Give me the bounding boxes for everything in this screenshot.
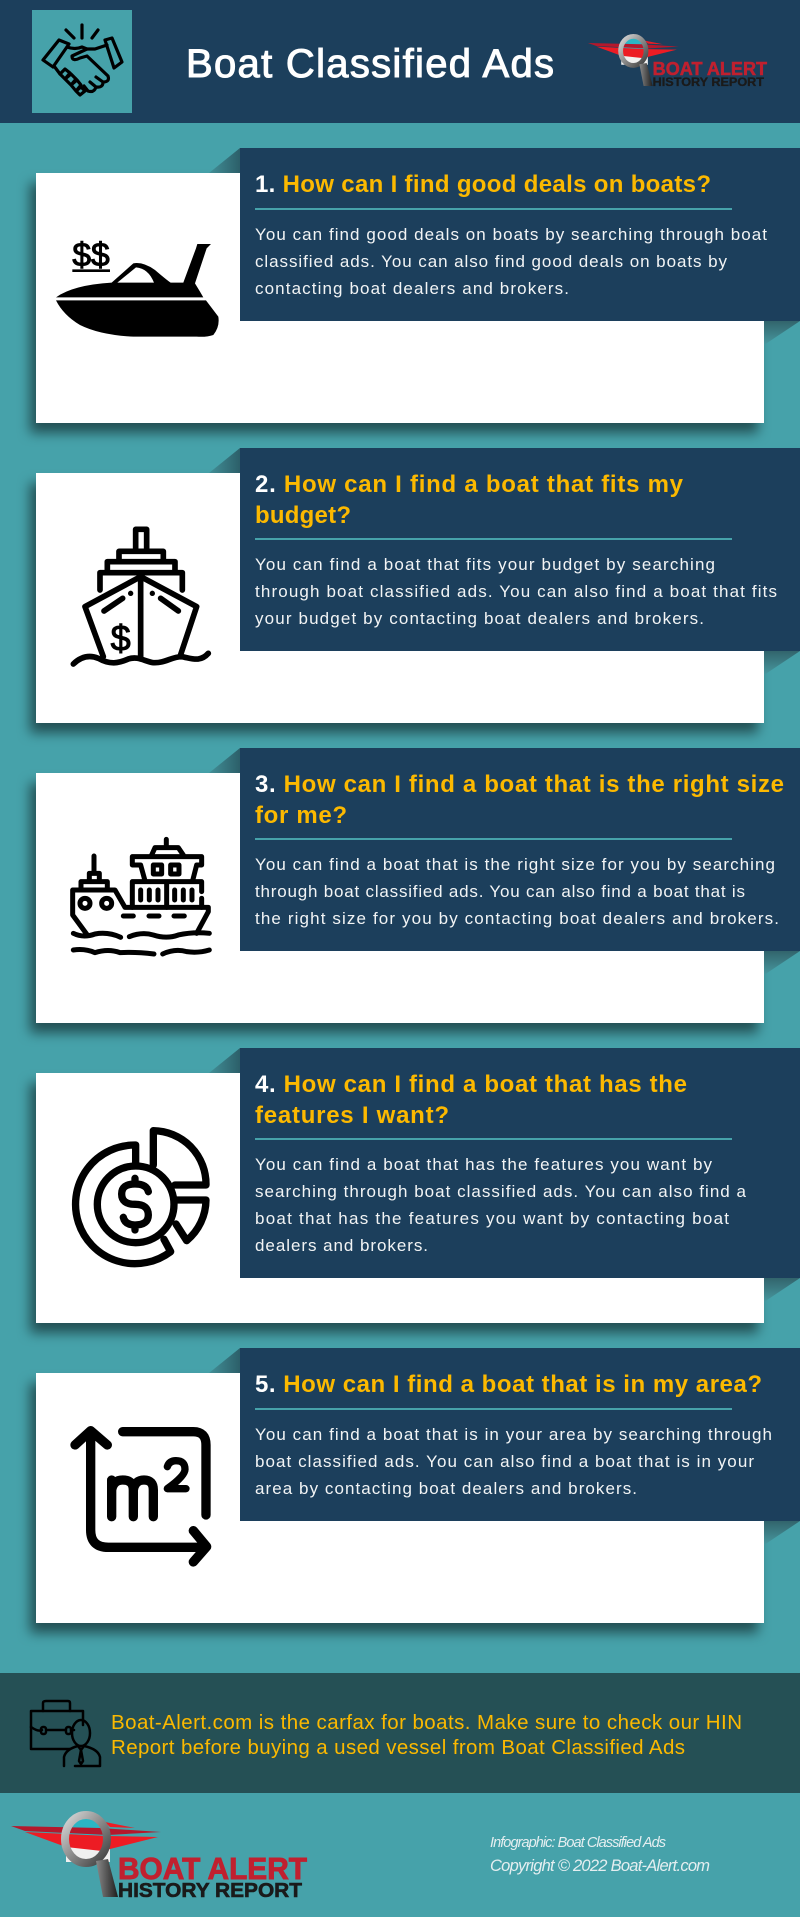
- answer box: [240, 748, 800, 951]
- heading: 4. How can I find a boat that has the: [255, 1071, 687, 1098]
- body text: the right size for you by contacting boat dealers and brokers.: [255, 909, 779, 928]
- answer box: [240, 148, 800, 321]
- body text: [255, 1425, 772, 1498]
- body text: You can find a boat that is the right size for you by searching: [255, 855, 775, 874]
- logo: header: HISTORY REPORT: [653, 75, 765, 89]
- heading: 3. How can I find a boat that is the right size: [255, 771, 784, 798]
- body text: through boat classified ads. You can also find a boat that is: [255, 882, 745, 901]
- panel: question 2: [36, 448, 800, 723]
- logo: header: BOAT ALERT: [653, 58, 768, 79]
- icon: ship with dollar: [73, 529, 208, 664]
- header banner: [0, 0, 800, 123]
- answer box: for me?: [255, 802, 347, 829]
- panel: question 5: [36, 1348, 800, 1623]
- answer box: [240, 448, 800, 651]
- body text: You can find good deals on boats by searching through boat: [255, 225, 767, 244]
- heading: 5. How can I find a boat that is in my area?: [255, 1371, 762, 1398]
- body text: [255, 555, 777, 628]
- white card: [36, 173, 764, 423]
- callout text: [111, 1711, 742, 1759]
- heading: 2. How can I find a boat that fits my: [255, 471, 684, 498]
- icon: speedboat with dollars: [56, 237, 219, 337]
- icon: cargo ship: [73, 839, 209, 954]
- logo: footer: BOAT ALERT: [118, 1851, 307, 1886]
- icon: handshake: [32, 10, 132, 113]
- panel: question 1: [36, 148, 800, 423]
- logo: footer: HISTORY REPORT: [118, 1880, 302, 1902]
- icon: speedboat with dollars: $$: [72, 237, 110, 274]
- footer credits: [490, 1835, 710, 1875]
- heading: 1. How can I find good deals on boats?: [255, 171, 711, 198]
- body text: [255, 855, 779, 928]
- body text: [255, 225, 767, 298]
- callout text: Boat-Alert.com is the carfax for boats. Make sure to check our HIN: [111, 1711, 742, 1734]
- logo: header: [588, 36, 768, 89]
- body text: You can find a boat that fits your budget by searching: [255, 555, 715, 574]
- white card: [36, 1073, 764, 1323]
- answer box: budget?: [255, 502, 351, 529]
- body text: your budget by contacting boat dealers and brokers.: [255, 609, 704, 628]
- icon: area square metres: [75, 1431, 207, 1562]
- footer credits: Infographic: Boat Classified Ads: [490, 1835, 666, 1851]
- body text: You can find a boat that is in your area by searching through: [255, 1425, 772, 1444]
- white card: [36, 1373, 764, 1623]
- answer box: [240, 1048, 800, 1278]
- answer box: features I want?: [255, 1102, 449, 1129]
- body text: searching through boat classified ads. You can also find a: [255, 1182, 747, 1201]
- title: Boat Classified Ads: [186, 42, 554, 86]
- body text: contacting boat dealers and brokers.: [255, 279, 569, 298]
- answer box: [240, 1348, 800, 1521]
- body text: classified ads. You can also find good deals on boats by: [255, 252, 728, 271]
- logo: footer: [11, 1815, 307, 1902]
- icon: briefcase and person: [31, 1701, 100, 1766]
- panel: question 3: [36, 748, 800, 1023]
- footer credits: Copyright © 2022 Boat-Alert.com: [490, 1857, 710, 1875]
- body text: [255, 1155, 747, 1255]
- white card: [36, 473, 764, 723]
- body text: boat classified ads. You can also find a boat that is in your: [255, 1452, 754, 1471]
- body text: You can find a boat that has the features you want by: [255, 1155, 712, 1174]
- callout text: Report before buying a used vessel from Boat Classified Ads: [111, 1736, 685, 1759]
- icon: ship with dollar: $: [111, 618, 131, 659]
- icon: dollar pie chart: [76, 1131, 206, 1264]
- panel: question 4: [36, 1048, 800, 1323]
- white card: [36, 773, 764, 1023]
- callout band: [0, 1673, 800, 1793]
- body text: dealers and brokers.: [255, 1236, 428, 1255]
- body text: through boat classified ads. You can also find a boat that fits: [255, 582, 777, 601]
- body text: boat that has the features you want by contacting boat: [255, 1209, 729, 1228]
- body text: area by contacting boat dealers and brokers.: [255, 1479, 637, 1498]
